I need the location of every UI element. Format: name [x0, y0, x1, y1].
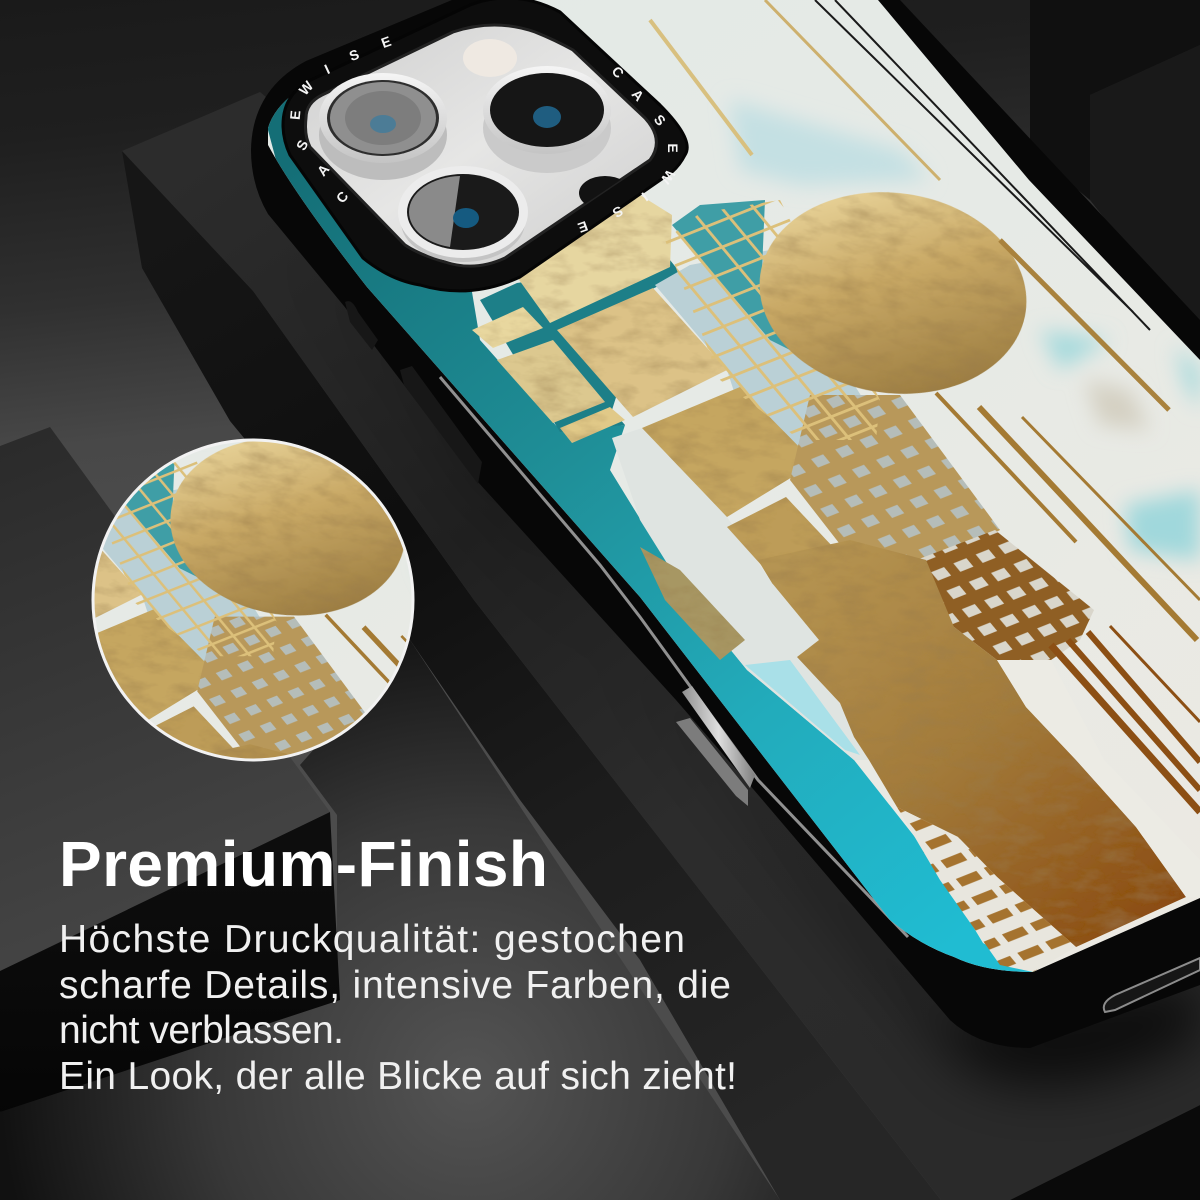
- right upper blocks: [1030, 0, 1200, 200]
- gold grid: [665, 200, 880, 440]
- lens top left: [319, 73, 447, 180]
- CASEWISE ring text: A: [629, 86, 647, 104]
- CASEWISE ring text: S: [347, 46, 361, 64]
- body text block: nicht verblassen.: [59, 1009, 344, 1052]
- large brown gold field: [758, 540, 1186, 947]
- lens bottom: [398, 166, 528, 262]
- CASEWISE ring text: I: [639, 189, 651, 205]
- teal grid patch: [672, 200, 790, 350]
- flash: [463, 39, 517, 77]
- CASEWISE ring text: W: [296, 77, 317, 98]
- stripe lines: [650, 0, 1200, 640]
- CASEWISE ring text: E: [379, 33, 393, 51]
- side buttons: [345, 301, 482, 484]
- CASEWISE ring text: S: [610, 203, 626, 221]
- CASEWISE ring text: E: [287, 110, 303, 120]
- gold blocks: [472, 195, 876, 660]
- white brush near teal: [612, 428, 869, 760]
- left block front face: [0, 812, 340, 1112]
- gold mosaic: [790, 395, 1000, 570]
- body text block: Ein Look, der alle Blicke auf sich zieht!: [59, 1055, 737, 1098]
- bottom right dark corner: [1010, 1105, 1200, 1200]
- charging port: [1104, 958, 1200, 1012]
- gold moon: [746, 175, 1040, 411]
- left block top surface: [0, 427, 330, 971]
- CASEWISE ring text: E: [576, 218, 590, 236]
- phone shadow: [300, 240, 1200, 1086]
- lower white lattice: [897, 807, 1076, 972]
- body text block: [59, 918, 737, 1098]
- case edge highlight: [440, 377, 908, 937]
- inset: zoomed detail circle: [92, 438, 414, 762]
- CASEWISE ring text: A: [314, 161, 332, 179]
- silver action button: [676, 686, 755, 806]
- soft teal brush strokes: [730, 100, 1200, 560]
- CASEWISE ring text: C: [609, 63, 627, 81]
- brown lattice: [920, 530, 1094, 660]
- CASEWISE ring text: I: [322, 61, 332, 77]
- lens top right: [483, 66, 611, 173]
- CASEWISE ring text: S: [293, 137, 311, 153]
- phone case: [251, 0, 1200, 1048]
- camera glass: [306, 25, 656, 266]
- CASEWISE ring text: C: [333, 188, 351, 206]
- CASEWISE ring text: S: [651, 111, 669, 129]
- blue gray background behind grid: [655, 250, 870, 475]
- phone artwork: [94, 0, 1200, 972]
- paper base: [96, 0, 1200, 972]
- case body: [251, 0, 1200, 1048]
- body text block: scharfe Details, intensive Farben, die: [59, 964, 731, 1007]
- camera bump: [283, 0, 687, 291]
- white strip: [997, 660, 1200, 898]
- CASEWISE ring text: W: [657, 167, 678, 188]
- dark teal underlay behind upper blocks: [480, 260, 682, 432]
- microphone hole: [579, 176, 621, 204]
- bump ring: [283, 0, 687, 291]
- CASEWISE ring text: [287, 33, 681, 236]
- teal band: [260, 90, 1040, 975]
- CASEWISE ring text: E: [665, 143, 681, 153]
- heading: Premium-Finish: Premium-Finish: [59, 828, 548, 900]
- floor: [0, 640, 780, 1200]
- body text block: Höchste Druckqualität: gestochen: [59, 918, 685, 961]
- main block side face: [122, 151, 941, 1200]
- brown stripes: [1051, 626, 1200, 812]
